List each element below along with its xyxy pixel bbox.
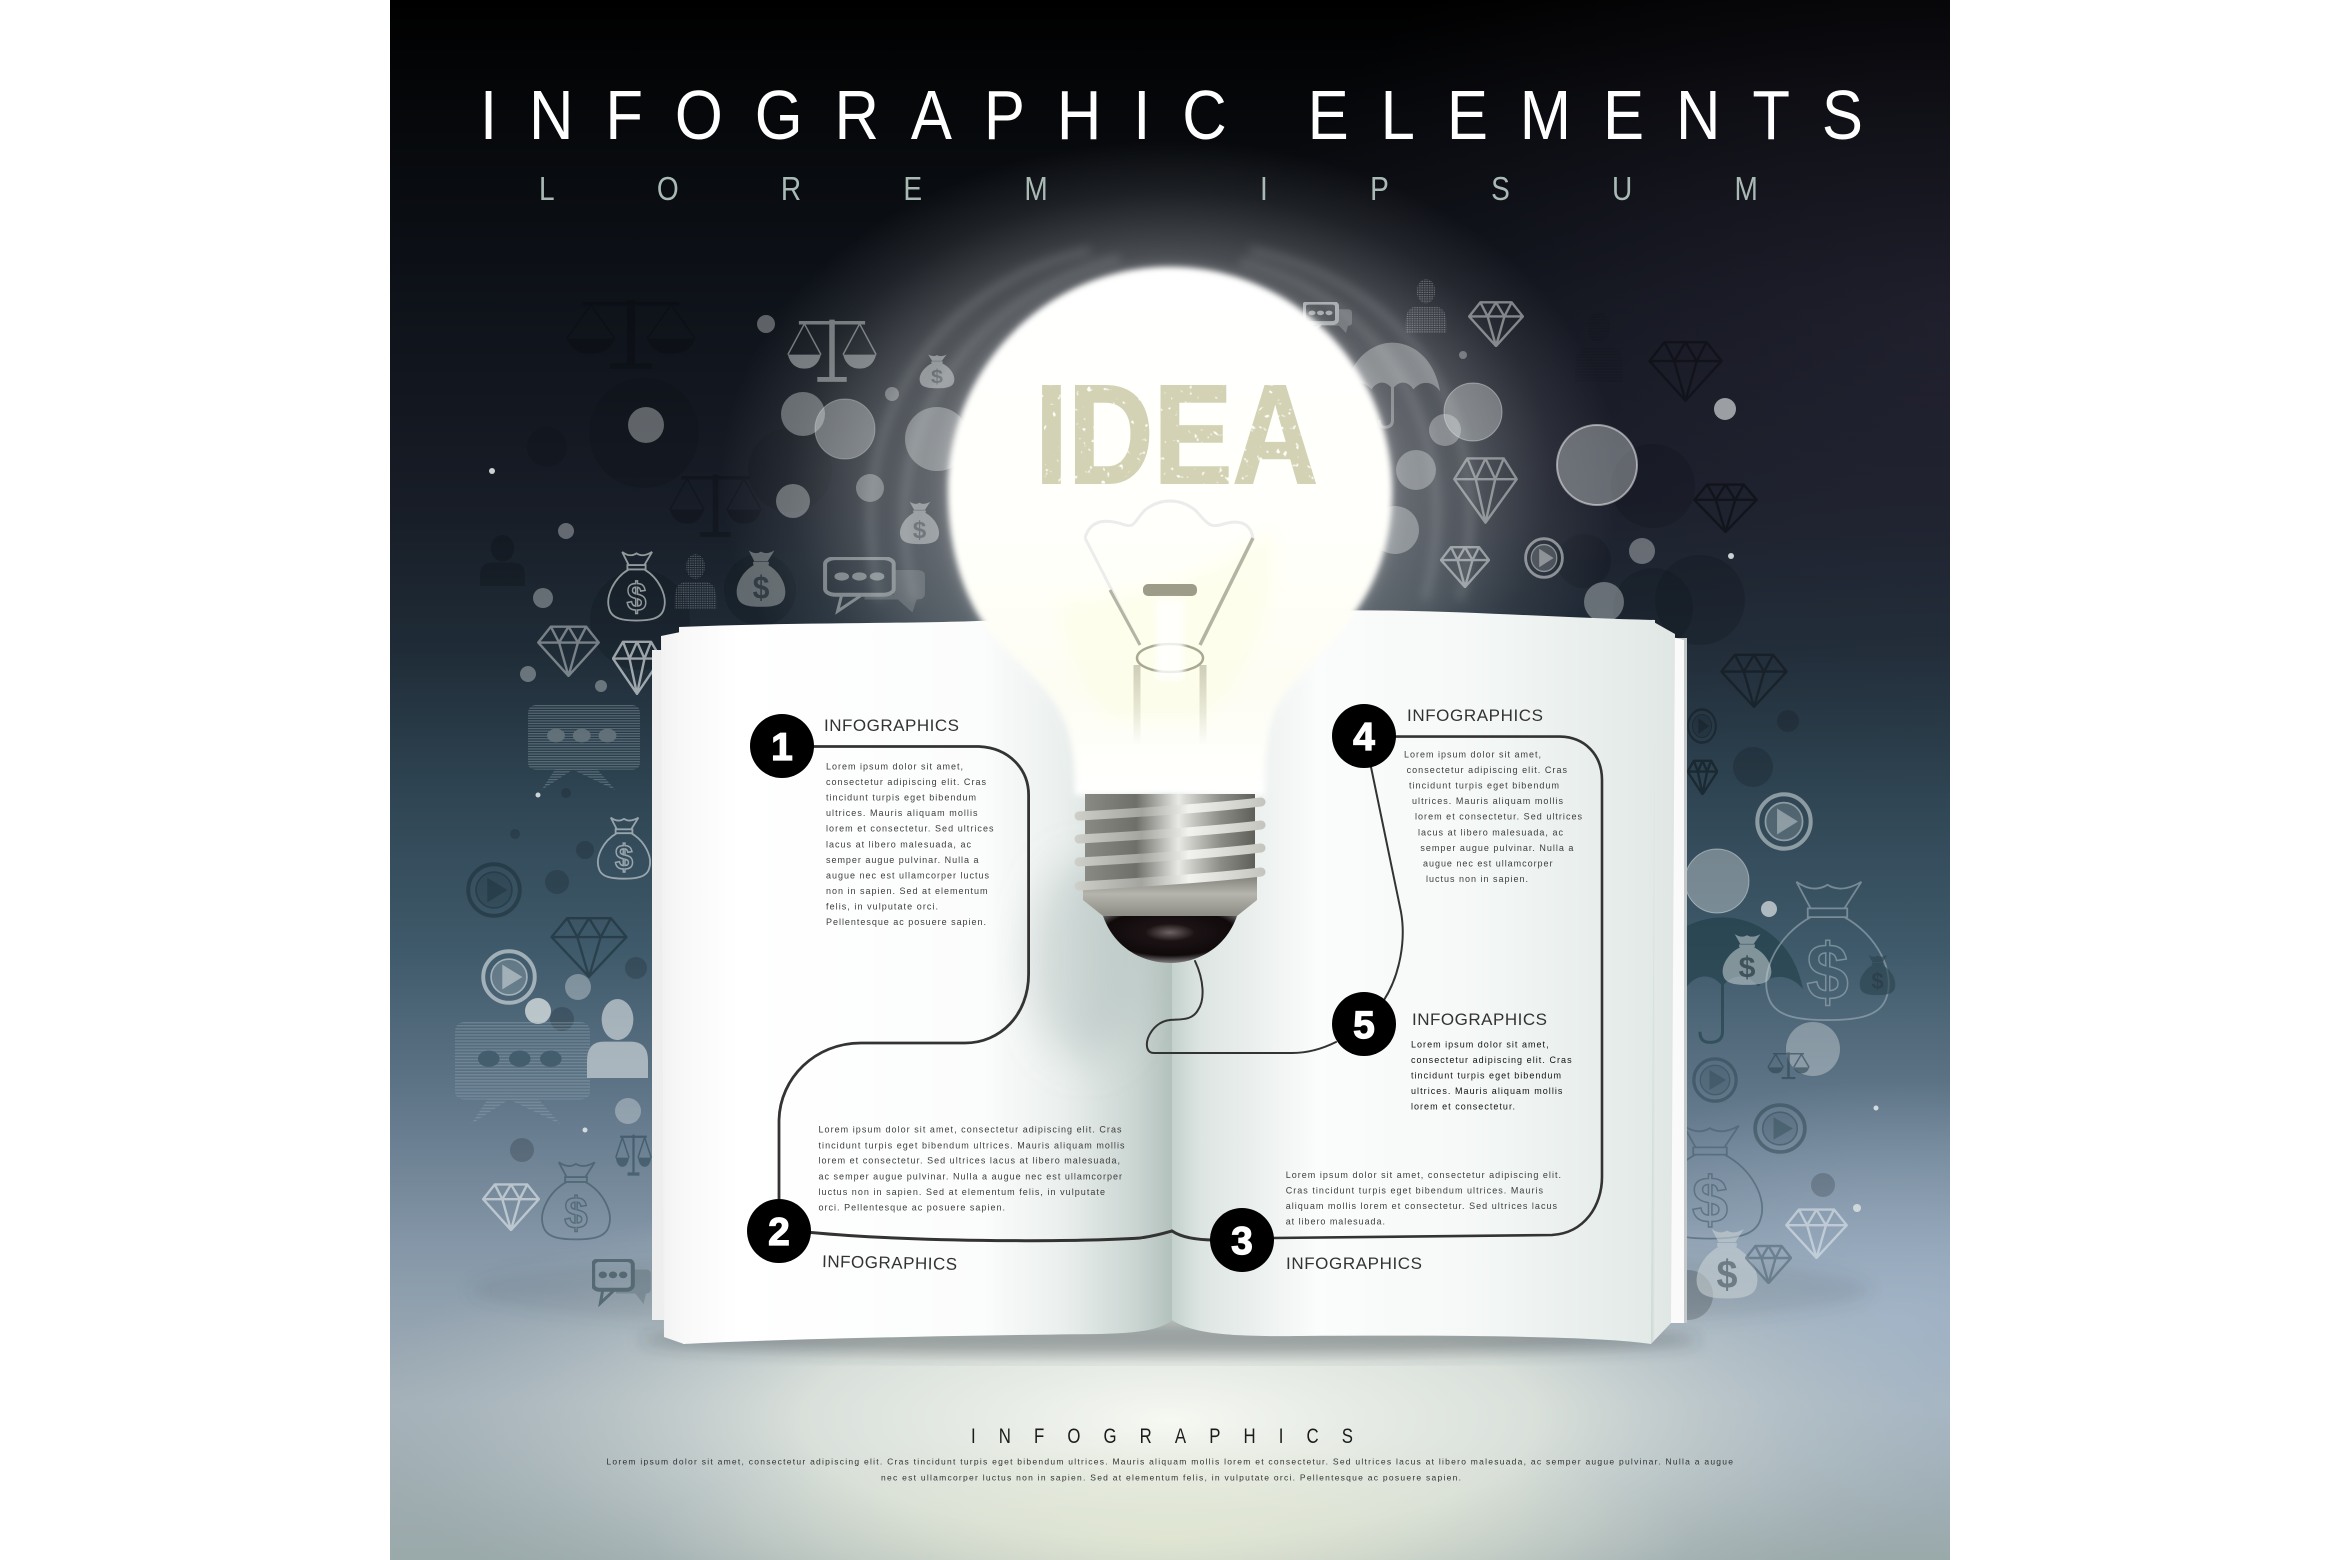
icon: pale diamond (483, 1184, 539, 1230)
icon: pale diamond bottom (1786, 1210, 1847, 1258)
text block 1: tincidunt turpis eget bibendum (826, 793, 976, 803)
text block 5 (1411, 1040, 1572, 1112)
heading 5: INFOGRAPHICS (1412, 1010, 1547, 1029)
text block 2 (818, 1124, 1125, 1212)
icon: dark scales near book (1688, 761, 1717, 794)
IDEA word: IDEA (1035, 355, 1318, 513)
badge 1 (750, 714, 814, 778)
subtitle: LOREM IPSUM (539, 171, 1758, 208)
icon: small scales right (1768, 1052, 1809, 1079)
text block 3: Cras tincidunt turpis eget bibendum ultrices. Mauris (1286, 1186, 1544, 1196)
line 3 to 4 (1273, 737, 1602, 1238)
icon: small scales (616, 1135, 651, 1176)
background circles: dark (510, 378, 1835, 1320)
icon: light play button (483, 951, 535, 1003)
heading 1: INFOGRAPHICS (824, 716, 959, 735)
text block 1: lorem et consectetur. Sed ultrices (826, 824, 994, 834)
icon: dotted person (675, 554, 716, 609)
text block 4: augue nec est ullamcorper (1423, 858, 1552, 868)
text block 4: Lorem ipsum dolor sit amet, (1404, 750, 1541, 760)
badge 4: 4 (1353, 716, 1375, 759)
icon: money bag outline lower (542, 1162, 610, 1239)
text block 1: Pellentesque ac posuere sapien. (826, 917, 986, 927)
icon: money bag outline (608, 552, 665, 621)
line 1 to 2 (779, 746, 1029, 1200)
text block 4: tincidunt turpis eget bibendum (1409, 780, 1559, 790)
icon: pale money bag (1723, 934, 1771, 985)
filament (1085, 501, 1253, 745)
book shadow (640, 1324, 1700, 1356)
text block 4: ultrices. Mauris aliquam mollis (1412, 796, 1564, 806)
icon: light play (1757, 794, 1811, 849)
left page (679, 615, 1172, 1344)
step 3 (1210, 1170, 1561, 1273)
glow halo behind bulb (720, 140, 1620, 820)
text block 5: tincidunt turpis eget bibendum (1411, 1070, 1561, 1080)
text block 3: Lorem ipsum dolor sit amet, consectetur adipiscing elit. (1286, 1170, 1561, 1180)
icon: chat top (1304, 303, 1352, 333)
warm interior (1060, 530, 1275, 720)
background circles: pale (489, 315, 1878, 1212)
icon: diamond outline (538, 627, 599, 676)
icon: dark dotted person (1575, 311, 1623, 382)
icon: umbrella grey (1345, 343, 1440, 427)
text block 4: consectetur adipiscing elit. Cras (1407, 765, 1568, 775)
badge 4 (1332, 704, 1396, 768)
text block 3 (1286, 1170, 1561, 1226)
icon: small money bag top (920, 354, 954, 388)
icon: money bag outline small (598, 818, 650, 879)
text block 1: consectetur adipiscing elit. Cras (826, 777, 986, 787)
icon: pale money bag lower (1697, 1229, 1757, 1299)
icon: dark scales upper left (567, 300, 695, 369)
icon: dark diamond top right (1650, 342, 1722, 401)
icon: play lower right (1755, 1105, 1805, 1152)
left under sheets (652, 628, 700, 1344)
icon: diamond mid (1441, 547, 1489, 587)
footer text: nec est ullamcorper luctus non in sapien. Sed at elementum felis, in vulputate orci. Pellentesque ac posuere sapien. (881, 1472, 1461, 1482)
bulb outer glow (948, 267, 1392, 795)
icon: dotted person top (1406, 279, 1446, 333)
text block 5: consectetur adipiscing elit. Cras (1411, 1055, 1572, 1065)
heading 3: INFOGRAPHICS (1286, 1254, 1422, 1273)
text block 1: semper augue pulvinar. Nulla a (826, 855, 978, 865)
icon: small dark money bag (1860, 955, 1895, 995)
screw base (1079, 794, 1261, 963)
icon: dark person (480, 535, 525, 586)
icon: striped chat (528, 705, 640, 790)
right page (1172, 610, 1655, 1344)
text block 4: lorem et consectetur. Sed ultrices (1415, 812, 1582, 822)
step 5 (1332, 992, 1572, 1112)
text block 3: aliquam mollis lorem et consectetur. Sed ultrices lacus (1286, 1201, 1558, 1211)
icons: right side cluster (1304, 279, 1895, 1299)
text block 1: felis, in vulputate orci. (826, 902, 938, 912)
open book (652, 610, 1687, 1344)
icon: diamond bottom (1746, 1246, 1791, 1283)
title: INFOGRAPHIC ELEMENTS (480, 75, 1863, 154)
icon: striped chat large (455, 1022, 590, 1124)
line 4 to 5 (1371, 767, 1403, 1000)
icon: money bag solid (737, 550, 785, 607)
icon: chat bubbles (825, 558, 925, 612)
badge 5: 5 (1353, 1004, 1375, 1047)
shadow under lamp base (1030, 860, 1140, 1060)
icon: dark diamond by book (1721, 655, 1787, 707)
text block 1: non in sapien. Sed at elementum (826, 886, 988, 896)
heading 2: INFOGRAPHICS (822, 1252, 957, 1274)
background panel (390, 0, 1950, 1560)
footer text: Lorem ipsum dolor sit amet, consectetur adipiscing elit. Cras tincidunt turpis eget bibendum ultrices. Mauris aliquam mollis lorem et consectetur. Sed ultrices lacus at libero malesuada, ac semper augue pulvinar. Nulla a augue (606, 1456, 1733, 1466)
right under sheets (1650, 620, 1687, 1344)
text block 5: lorem et consectetur. (1411, 1102, 1515, 1112)
icon: dark play (1688, 709, 1716, 743)
icon: light person (587, 999, 648, 1078)
icon: large money bag outline (1766, 882, 1889, 1020)
text block 5: ultrices. Mauris aliquam mollis (1411, 1086, 1563, 1096)
icon: dark umbrella (1642, 917, 1803, 1042)
icon: diamond top (1469, 302, 1523, 346)
step 1 (750, 714, 994, 927)
text block 4 (1404, 750, 1582, 884)
text block 1: augue nec est ullamcorper luctus (826, 870, 990, 880)
badge 3 (1210, 1208, 1274, 1272)
text block 4: semper augue pulvinar. Nulla a (1420, 843, 1573, 853)
icon: money bag outline lower right (1658, 1126, 1762, 1239)
icon: patterned diamond (1454, 458, 1517, 523)
text block 1: lacus at libero malesuada, ac (826, 839, 972, 849)
badge 5 (1332, 992, 1396, 1056)
text block 1: Lorem ipsum dolor sit amet, (826, 762, 963, 772)
text block 2: luctus non in sapien. Sed at elementum felis, in vulputate (818, 1187, 1105, 1197)
icons: left side cluster (455, 300, 954, 1304)
icon: play mid (1526, 539, 1562, 577)
line 2 to 3 (811, 1231, 1215, 1241)
icon: dark play button (468, 864, 520, 916)
footer text (606, 1456, 1733, 1482)
badge 2 (747, 1199, 811, 1263)
text block 5: Lorem ipsum dolor sit amet, (1411, 1040, 1549, 1050)
icon: dark scales middle (670, 475, 761, 537)
text block 2: orci. Pellentesque ac posuere sapien. (818, 1202, 1005, 1212)
text block 4: lacus at libero malesuada, ac (1418, 828, 1564, 838)
text block 2: lorem et consectetur. Sed ultrices lacus at libero malesuada, (818, 1156, 1120, 1166)
connecting lines (779, 737, 1602, 1241)
text block 2: tincidunt turpis eget bibendum ultrices. Mauris aliquam mollis (818, 1140, 1125, 1150)
text block 1 (826, 762, 994, 927)
icon: dark diamond (552, 918, 626, 977)
light bulb (948, 267, 1392, 963)
text block 1: ultrices. Mauris aliquam mollis (826, 808, 978, 818)
heading 4: INFOGRAPHICS (1407, 706, 1543, 725)
icon: dark chat (593, 1260, 651, 1304)
icon: dark diamond right (1694, 485, 1757, 532)
bulb glass (948, 267, 1392, 795)
text block 3: at libero malesuada. (1286, 1216, 1385, 1226)
text block 2: Lorem ipsum dolor sit amet, consectetur adipiscing elit. Cras (818, 1124, 1122, 1134)
text block 4: luctus non in sapien. (1426, 874, 1528, 884)
icon: play lower left (1694, 1059, 1736, 1101)
icon: light scales (788, 320, 876, 382)
badge 1: 1 (771, 726, 793, 769)
step 2 (747, 1124, 1125, 1274)
line 5 to bulb (1147, 961, 1336, 1053)
badge 2: 2 (768, 1211, 790, 1254)
icon: diamond outline light (613, 642, 661, 694)
text block 2: ac semper augue pulvinar. Nulla a augue nec est ullamcorper (818, 1172, 1122, 1182)
step 4 (1332, 704, 1582, 884)
black cap (1103, 916, 1237, 963)
footer heading: INFOGRAPHICS (971, 1425, 1353, 1449)
icon: money bag grey (900, 502, 939, 544)
badge 3: 3 (1231, 1220, 1253, 1263)
